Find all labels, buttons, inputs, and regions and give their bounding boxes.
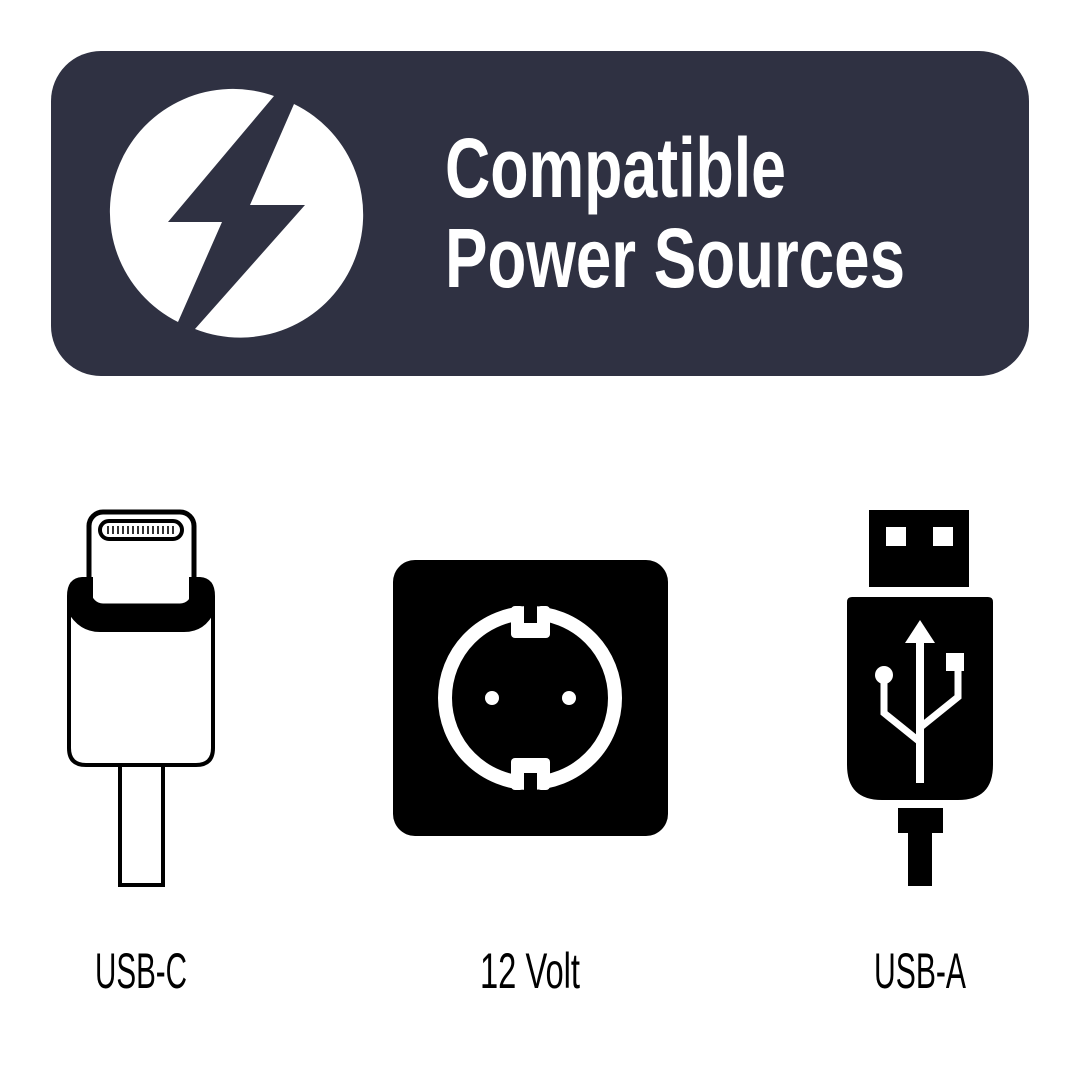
label: USB-C: USB-C <box>95 943 187 999</box>
icon: lightning circle <box>110 89 363 338</box>
icon: 12V socket <box>393 560 668 836</box>
labels <box>95 943 966 999</box>
icon: USB-A plug <box>847 510 993 886</box>
icon: USB-C plug <box>67 512 215 885</box>
header panel <box>51 51 1029 376</box>
title: Compatible <box>445 121 786 215</box>
label: 12 Volt: 12 Volt <box>480 943 580 999</box>
label: USB-A: USB-A <box>874 943 966 999</box>
title <box>445 121 905 305</box>
title: Power Sources <box>445 211 905 305</box>
